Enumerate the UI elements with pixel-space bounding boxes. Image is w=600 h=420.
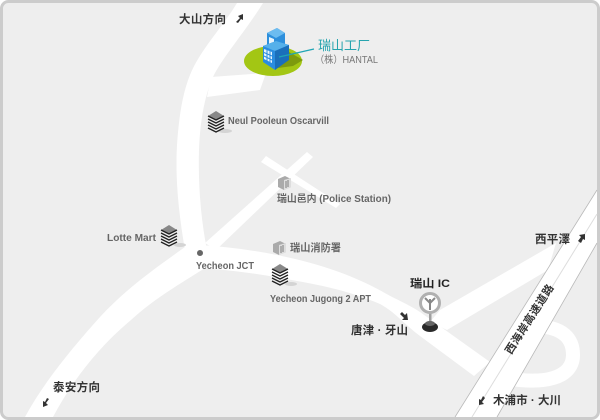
ramp to Seopyeongtaek [430,243,556,330]
expressway [455,190,597,417]
apartment icon: Neul Pooleun [208,111,232,133]
expressway edges [455,190,597,417]
apartment icon: Lotte Mart [161,225,186,247]
icon: interchange sign [420,294,440,332]
junction dot [197,250,203,256]
green ground [244,46,302,76]
expressway median [472,214,597,417]
road from Yecheon JCT to IC and highway [198,245,490,376]
label: fire station: 瑞山消防署 [290,241,341,254]
road to Taean [25,247,215,417]
label: Mokpo Daecheon: 木浦市 · 大川 [493,393,561,407]
building shadow [278,52,303,68]
lower tower [263,41,289,70]
factory company label: （株）HANTAL [315,53,378,66]
label: Yecheon JCT: Yecheon JCT [196,261,254,272]
label: north direction: 大山方向 [179,12,226,26]
label: Seopyeongtaek: 西平澤 [535,232,570,246]
north-south main road [176,3,263,250]
label: Dangjin Asan: 唐津 · 牙山 [351,323,408,337]
arrow: north-east [236,14,243,23]
label: police station: 瑞山邑内 (Police Station) [277,192,391,205]
label: Taean direction: 泰安方向 [53,380,100,394]
label: Yecheon Jugong 2 APT: Yecheon Jugong 2 APT [270,294,371,305]
factory name: 瑞山工厂 [318,38,370,53]
factory access road [207,73,266,97]
arrow: south-west [479,396,485,405]
arrow: south-east [400,312,408,320]
factory marker [244,28,314,76]
cross street [261,156,340,208]
interchange loop [505,326,573,381]
small building icon: fire station [273,241,286,255]
arrow: south-west [43,398,49,407]
leader line [279,49,314,57]
arrow: north-east [578,234,585,243]
small building icon: police station [278,176,291,190]
label: Neul Pooleun Oscarvill: Neul Pooleun Oscarvill [228,116,329,127]
apartment icon: Yecheon Jugong [272,264,297,286]
label: Lotte Mart: Lotte Mart [107,232,156,244]
branch road to police station [205,152,313,250]
expressway surface [455,190,597,417]
label: Seosan IC: 瑞山 IC [410,276,450,290]
upper tower [267,28,285,50]
expressway label: 西海岸高速道路 [502,282,557,357]
